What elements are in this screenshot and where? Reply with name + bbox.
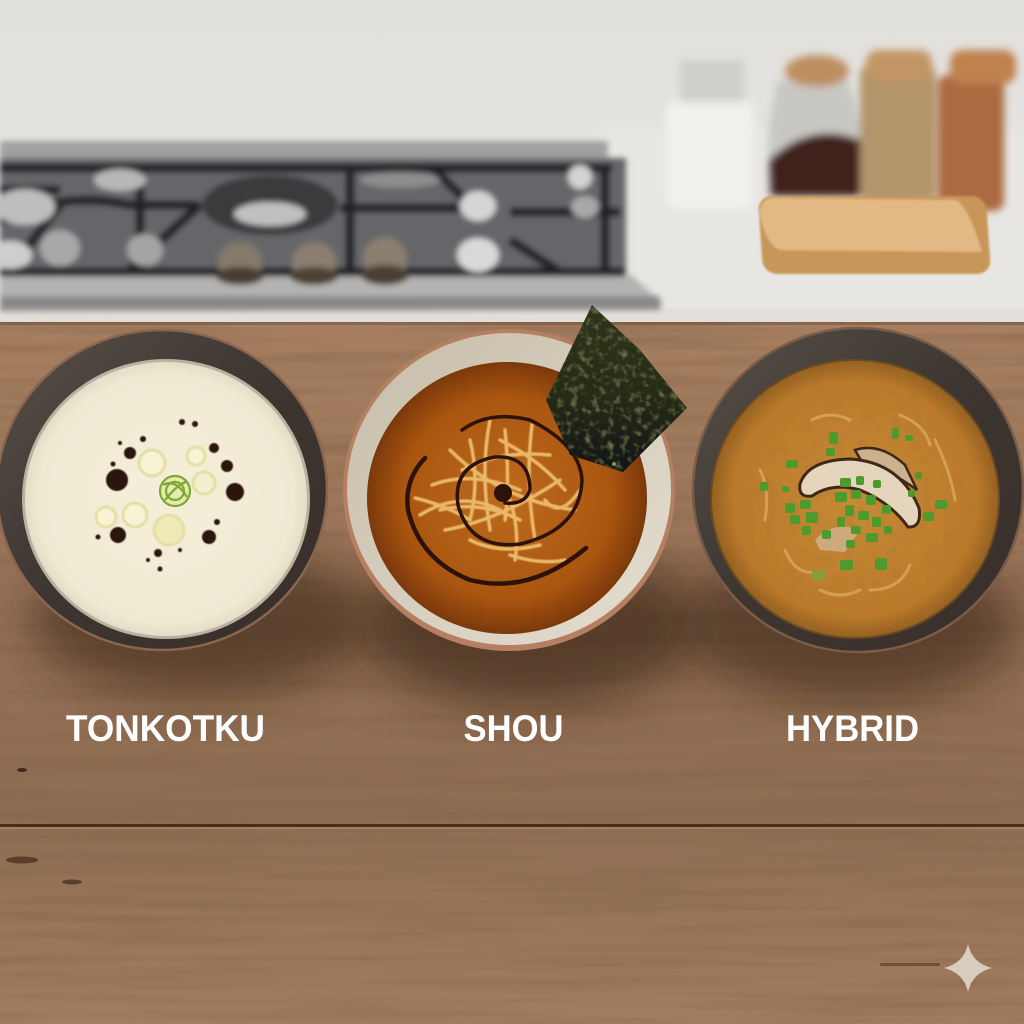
- label: tonkotku: TONKOTKU: [66, 708, 265, 749]
- mushrooms: [855, 448, 917, 490]
- cutting board: [758, 196, 991, 274]
- spice jars: [666, 50, 1016, 211]
- green onions: [760, 428, 947, 580]
- noodles: [760, 415, 955, 595]
- icon: sparkle watermark: [944, 944, 992, 992]
- tare dots: [96, 419, 244, 572]
- bowl: tonkotsu: [0, 329, 328, 651]
- nori: [546, 305, 687, 472]
- stove: [0, 141, 664, 312]
- noodles: [415, 420, 580, 562]
- kitchen background: [0, 0, 1024, 322]
- tare swirl: [407, 417, 586, 584]
- grates: [0, 165, 625, 272]
- wooden table: [0, 322, 1024, 1024]
- label: shou: SHOU: [464, 708, 564, 749]
- scallions: [96, 447, 215, 545]
- bowl: hybrid: [692, 327, 1024, 653]
- bowl: shoyu: [343, 305, 687, 651]
- label: hybrid: HYBRID: [786, 708, 919, 749]
